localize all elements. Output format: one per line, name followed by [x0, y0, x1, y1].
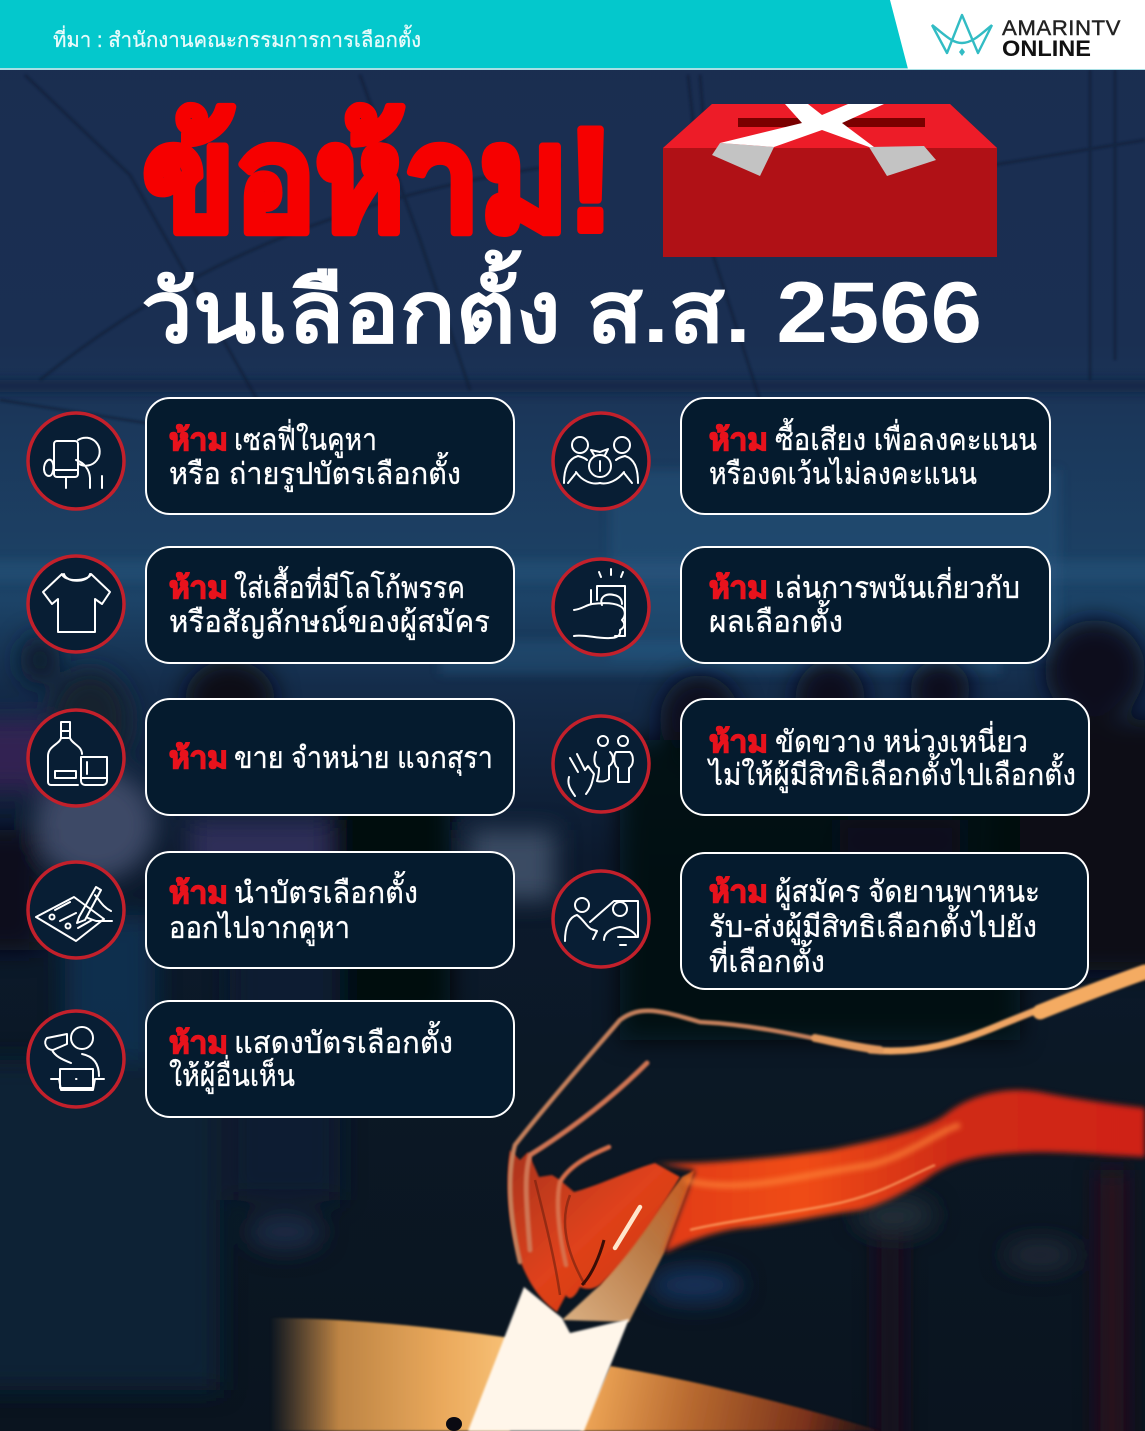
- panel: prohibition 4 take ballot out: นำบัตรเลือกตั้ง: [234, 871, 418, 910]
- panel: prohibition 6 vote buying: ซื้อเสียง เพื่อลงคะแนน: [775, 418, 1037, 457]
- panel: prohibition 1 selfie: [28, 398, 514, 514]
- panel: prohibition 4 take ballot out: [28, 852, 514, 968]
- panel: prohibition 8 obstruct voters: ขัดขวาง หน่วงเหนี่ยว: [775, 721, 1028, 759]
- glow of ballot box: [270, 1318, 880, 1431]
- rim light on arm and fingers: [510, 970, 1145, 1265]
- icon: t-shirt: [28, 556, 124, 652]
- panel: prohibition 7 gambling: เล่นการพนันเกี่ยวกับ: [775, 567, 1020, 605]
- panel: prohibition 8 obstruct voters: ห้าม: [709, 726, 768, 759]
- panel: prohibition 5 show ballot: แสดงบัตรเลือกตั้ง: [234, 1021, 453, 1060]
- panel: prohibition 3 alcohol: ขาย จำหน่าย แจกสุรา: [234, 742, 493, 777]
- panel: prohibition 2 shirt: [28, 547, 514, 663]
- panel: prohibition 9 candidate transport: [553, 853, 1088, 989]
- title: prohibited: ข้อห้าม!: [143, 98, 613, 261]
- panel: prohibition 7 gambling: [553, 547, 1050, 663]
- panel: prohibition 6 vote buying: หรืองดเว้นไม่ลงคะแนน: [709, 456, 977, 491]
- panel: prohibition 4 take ballot out: ออกไปจากคูหา: [169, 910, 350, 946]
- source line: ที่มา : สำนักงานคณะกรรมการการเลือกตั้ง: [53, 25, 421, 52]
- panel: prohibition 9 candidate transport: ที่เลือกตั้ง: [709, 940, 825, 979]
- panel: prohibition 1 selfie: เซลฟี่ในคูหา: [234, 419, 377, 458]
- icon: hand writing on ballot: [28, 862, 124, 958]
- panel: prohibition 9 candidate transport: ผู้สมัคร จัดยานพาหนะ: [775, 876, 1040, 910]
- icon: person showing ballot: [28, 1011, 124, 1107]
- icon: selfie: [28, 413, 124, 509]
- panel: prohibition 2 shirt: ห้าม: [169, 572, 228, 605]
- panel: prohibition 3 alcohol: [28, 699, 514, 815]
- panel: prohibition 9 candidate transport: รับ-ส่งผู้มีสิทธิเลือกตั้งไปยัง: [709, 905, 1037, 945]
- icon: money bag between people: [553, 413, 649, 509]
- logo: Amarin TV Online: AMARINTV: [1002, 17, 1121, 40]
- icon: driver and passenger in vehicle: [553, 871, 649, 967]
- panel: prohibition 2 shirt: ใส่เสื้อที่มีโลโก้พรรค: [234, 566, 465, 605]
- panel: prohibition 1 selfie: ห้าม: [169, 424, 228, 457]
- ballot paper: [468, 1170, 695, 1431]
- icon: ballot box with white cross: [663, 104, 997, 257]
- panel: prohibition 4 take ballot out: ห้าม: [169, 877, 228, 910]
- logo: Amarin TV Online: [890, 0, 1145, 69]
- panel: prohibition 8 obstruct voters: ไม่ให้ผู้มีสิทธิเลือกตั้งไปเลือกตั้ง: [707, 753, 1076, 793]
- hand casting ballot: [270, 970, 1145, 1431]
- logo: Amarin TV Online: ONLINE: [1002, 36, 1091, 61]
- panel: prohibition 7 gambling: ผลเลือกตั้ง: [709, 600, 843, 639]
- panel: prohibition 5 show ballot: [28, 1001, 514, 1117]
- panel: prohibition 1 selfie: หรือ ถ่ายรูปบัตรเลือกตั้ง: [169, 452, 461, 492]
- panel: prohibition 8 obstruct voters: [553, 699, 1089, 815]
- arm and hand: [508, 1090, 1145, 1312]
- panel: prohibition 2 shirt: หรือสัญลักษณ์ของผู้สมัคร: [169, 605, 490, 640]
- panel: prohibition 9 candidate transport: ห้าม: [709, 876, 768, 909]
- subtitle: วันเลือกตั้ง ส.ส. 2566: [141, 249, 982, 361]
- panel: prohibition 6 vote buying: [553, 398, 1050, 514]
- panel: prohibition 6 vote buying: ห้าม: [709, 424, 768, 457]
- icon: hand holding cash: [553, 559, 649, 655]
- header bar: [0, 0, 1145, 70]
- icon: hand stopping two people: [553, 716, 649, 812]
- panel: prohibition 5 show ballot: ห้าม: [169, 1027, 228, 1060]
- panel: prohibition 7 gambling: ห้าม: [709, 572, 768, 605]
- icon: bottle and glass: [28, 710, 124, 806]
- panel: prohibition 3 alcohol: ห้าม: [169, 742, 228, 775]
- panel: prohibition 5 show ballot: ให้ผู้อื่นเห็น: [169, 1055, 295, 1094]
